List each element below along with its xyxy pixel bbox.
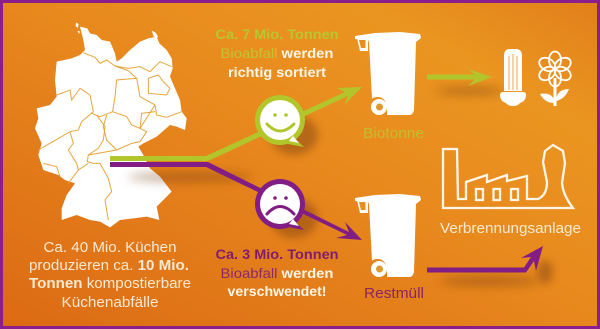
purple text block: Bioabfall werden xyxy=(220,265,334,281)
state borders xyxy=(38,53,182,220)
icon: residual waste bin xyxy=(355,194,421,277)
main text xyxy=(29,239,191,311)
arrow to bulb and flower xyxy=(427,69,492,86)
purple text block: Ca. 3 Mio. Tonnen xyxy=(216,246,338,262)
icon: flower xyxy=(537,52,573,106)
green text block: Ca. 7 Mio. Tonnen xyxy=(216,26,338,42)
label: Verbrennungsanlage: Verbrennungsanlage xyxy=(440,220,581,237)
smiley speech bubble xyxy=(255,95,305,147)
purple text block xyxy=(216,246,338,299)
main text: Küchenabfälle xyxy=(62,294,158,311)
main text: Ca. 40 Mio. Küchen xyxy=(44,239,176,256)
purple text block: verschwendet! xyxy=(228,283,326,299)
green text block: richtig sortiert xyxy=(228,64,326,80)
main text: produzieren ca. 10 Mio. xyxy=(29,257,189,274)
green text block xyxy=(216,26,338,80)
icon: organic waste bin xyxy=(355,32,421,115)
icon: incineration plant xyxy=(443,145,573,208)
label: Biotonne: Biotonne xyxy=(363,125,424,142)
label: Restmüll: Restmüll xyxy=(364,285,424,302)
icon: energy-saving bulb xyxy=(500,49,526,106)
green arrow to Biotonne xyxy=(110,87,362,161)
map of Germany xyxy=(35,23,187,227)
sad speech bubble xyxy=(255,179,305,230)
main text: Tonnen kompostierbare xyxy=(29,275,191,292)
purple arrow to Restmüll xyxy=(110,162,362,240)
arrow from Restmüll up to plant xyxy=(427,246,543,272)
soft shadows xyxy=(128,87,553,286)
green text block: Bioabfall werden xyxy=(220,45,334,61)
